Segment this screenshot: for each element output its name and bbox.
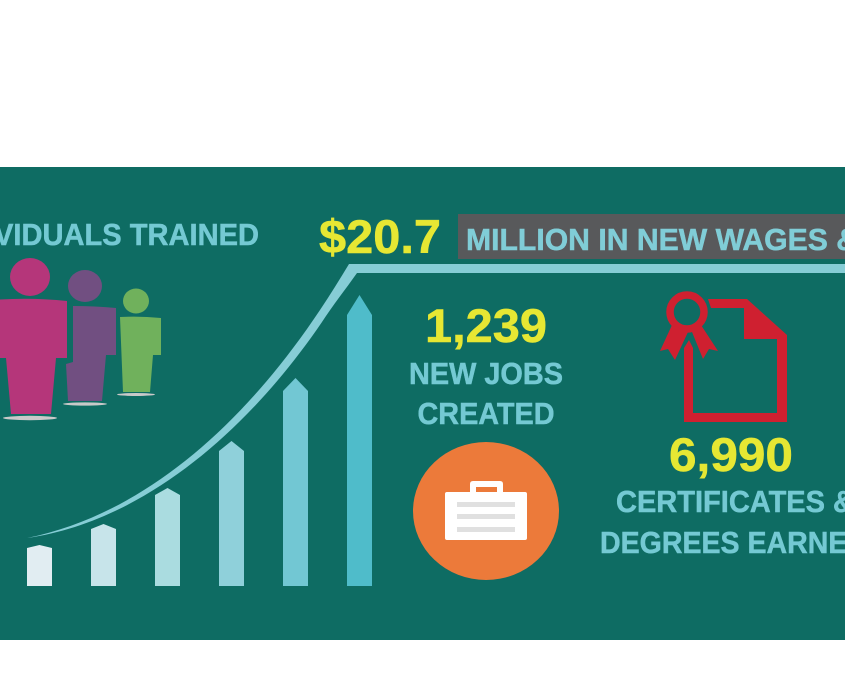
heading: individuals trained: VIDUALS TRAINED	[0, 217, 259, 252]
bar 5	[283, 378, 308, 586]
bar 2	[91, 524, 116, 586]
bar 6	[347, 295, 372, 586]
growth curve arrow line	[27, 264, 845, 538]
icon: three people	[0, 258, 161, 420]
person: magenta	[0, 258, 67, 420]
icon: briefcase in orange circle	[413, 442, 559, 580]
panel: background	[0, 167, 845, 640]
person: green	[117, 288, 161, 396]
person: purple	[63, 270, 116, 406]
bar 4	[219, 441, 244, 586]
bar 3	[155, 488, 180, 586]
figure: new jobs count: 1,239	[425, 299, 547, 352]
figure: certificates count: 6,990	[669, 428, 793, 481]
figure: wages amount: $20.7	[319, 210, 441, 263]
bar 1	[27, 545, 52, 586]
label: created: CREATED	[418, 396, 554, 431]
label: new jobs: NEW JOBS	[409, 356, 563, 391]
bar chart	[27, 295, 372, 586]
icon: certificate with ribbon	[660, 295, 787, 422]
